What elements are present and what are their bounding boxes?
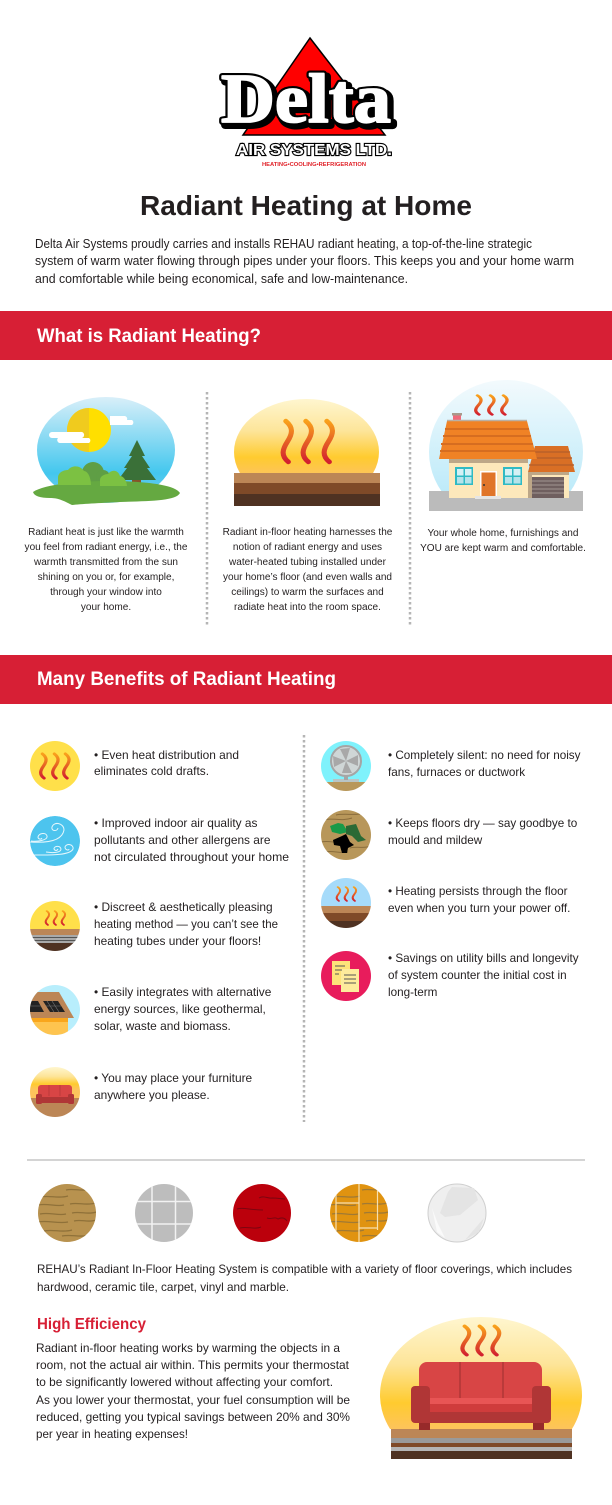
- illustration: warm house: [429, 380, 583, 524]
- benefit: alternative energy: • Easily integrates with alternative: [94, 985, 272, 999]
- banner: many benefits: Many Benefits of Radiant Heating: [37, 669, 336, 690]
- floor sample: vinyl: [330, 1184, 388, 1242]
- benefit: silent: [388, 749, 581, 779]
- caption: radiant heat: shining on you or, for example,: [38, 572, 174, 583]
- icon: savings: [321, 951, 371, 1001]
- benefit: heat persists: even when you turn your power off.: [388, 902, 570, 915]
- benefit: discreet: heating method — you can’t see the: [94, 917, 278, 931]
- icon: sofa: [30, 1067, 80, 1118]
- caption: in-floor heating: your home’s floor (and even walls and: [223, 572, 392, 583]
- compatibility text: hardwood, ceramic tile, carpet, vinyl and marble.: [37, 1280, 289, 1294]
- benefit: alternative energy: solar, waste and biomass.: [94, 1019, 231, 1033]
- intro text: and comfortable while being economical, safe and low-maintenance.: [35, 272, 408, 286]
- caption: radiant heat: Radiant heat is just like the warmth: [28, 527, 184, 538]
- benefit: heat persists: [388, 885, 570, 915]
- high efficiency text: room, not the actual air within. This permits your thermostat: [36, 1358, 350, 1372]
- caption: in-floor heating: water-heated tubing installed under: [228, 557, 387, 568]
- icon: solar roof: [30, 985, 80, 1038]
- benefit: discreet: • Discreet & aesthetically pleasing: [94, 900, 273, 914]
- floor sample: marble: [428, 1184, 486, 1242]
- caption: radiant heat: your home.: [81, 602, 131, 613]
- benefit: dry floors: mould and mildew: [388, 834, 483, 847]
- benefit: savings: [388, 952, 579, 999]
- high efficiency text: to be significantly lowered without affecting your comfort.: [36, 1375, 333, 1389]
- illustration: heated sofa: [380, 1317, 582, 1473]
- caption: whole home: YOU are kept warm and comfortable.: [420, 543, 586, 554]
- illustration: sun and landscape: [33, 397, 180, 505]
- caption: in-floor heating: notion of radiant energy and uses: [233, 542, 382, 553]
- benefit: furniture: • You may place your furniture: [94, 1071, 253, 1085]
- banner: what is radiant heating: What is Radiant Heating?: [37, 326, 261, 347]
- icon: persistent heat: [321, 878, 371, 929]
- high efficiency text: reduced, getting you typical savings between 20% and 30%: [36, 1410, 350, 1424]
- benefit: air quality: • Improved indoor air quality as: [94, 816, 257, 830]
- benefit: alternative energy: [94, 985, 272, 1033]
- icon: mould: [321, 810, 371, 860]
- benefit: air quality: not circulated throughout your home: [94, 850, 289, 864]
- caption: radiant heat: you feel from radiant energy, i.e., the: [25, 542, 188, 553]
- benefit: savings: of system counter the initial cost in: [388, 969, 567, 982]
- benefit: furniture: [94, 1071, 253, 1102]
- high efficiency text: [36, 1341, 350, 1441]
- caption: in-floor heating: Radiant in-floor heating harnesses the: [223, 527, 393, 538]
- compatibility text: [37, 1262, 572, 1294]
- caption: in-floor heating: [223, 527, 393, 613]
- benefit: even heat: [94, 748, 239, 778]
- benefit: heat persists: • Heating persists through the floor: [388, 885, 568, 898]
- high efficiency text: per year in heating expenses!: [36, 1427, 188, 1441]
- heading: high efficiency: High Efficiency: [37, 1316, 146, 1333]
- benefit: savings: long-term: [388, 986, 437, 999]
- icon: air swirl: [30, 816, 80, 866]
- caption: radiant heat: [25, 527, 188, 613]
- benefit: silent: • Completely silent: no need for noisy: [388, 749, 581, 762]
- logo: Delta: [221, 61, 391, 138]
- caption: radiant heat: warmth transmitted from the sun: [33, 557, 178, 568]
- caption: whole home: Your whole home, furnishings and: [428, 528, 578, 539]
- benefit: discreet: heating tubes under your floors!: [94, 934, 261, 948]
- banner: many benefits: [0, 655, 612, 704]
- floor sample: hardwood: [38, 1184, 96, 1242]
- caption: in-floor heating: ceilings) to warm the surfaces and: [231, 587, 384, 598]
- icon: fan: [321, 741, 371, 792]
- intro text: Delta Air Systems proudly carries and installs REHAU radiant heating, a top-of-the-line strategic: [35, 237, 532, 251]
- benefit: dry floors: [388, 817, 578, 847]
- icon: heat waves: [30, 741, 80, 791]
- logo: Delta: [221, 61, 391, 138]
- compatibility text: REHAU’s Radiant In-Floor Heating System is compatible with a variety of floor coverings, which includes: [37, 1262, 572, 1276]
- high efficiency text: Radiant in-floor heating works by warming the objects in a: [36, 1341, 340, 1355]
- intro text: [35, 237, 574, 286]
- logo: [221, 38, 394, 168]
- illustration: heated floor: [234, 399, 380, 506]
- logo: AIR SYSTEMS LTD.: [236, 142, 392, 159]
- logo: Delta: [224, 64, 394, 141]
- benefit: silent: fans, furnaces or ductwork: [388, 766, 525, 779]
- benefit: even heat: • Even heat distribution and: [94, 748, 239, 762]
- caption: in-floor heating: radiate heat into the room space.: [234, 602, 381, 613]
- benefit: air quality: pollutants and other allergens are: [94, 833, 271, 847]
- benefit: even heat: eliminates cold drafts.: [94, 764, 209, 778]
- benefit: discreet: [94, 900, 278, 948]
- benefit: alternative energy: energy sources, like geothermal,: [94, 1002, 266, 1016]
- benefit: furniture: anywhere you please.: [94, 1088, 210, 1102]
- floor sample: carpet: [233, 1184, 291, 1242]
- intro text: system of warm water flowing through pipes under your floors. This keeps you and your home warm: [35, 254, 574, 268]
- benefit: dry floors: • Keeps floors dry — say goodbye to: [388, 817, 578, 830]
- caption: radiant heat: through your window into: [50, 587, 162, 598]
- logo: HEATING•COOLING•REFRIGERATION: [262, 162, 366, 168]
- benefit: savings: • Savings on utility bills and longevity: [388, 952, 579, 965]
- banner: what is radiant heating: [0, 311, 612, 360]
- title: Radiant Heating at Home: [140, 190, 472, 221]
- icon: discreet floor: [30, 901, 80, 952]
- benefit: air quality: [94, 816, 289, 864]
- floor sample: ceramic tile: [135, 1184, 193, 1242]
- high efficiency text: As you lower your thermostat, your fuel consumption will be: [36, 1393, 350, 1407]
- caption: whole home: [420, 528, 586, 554]
